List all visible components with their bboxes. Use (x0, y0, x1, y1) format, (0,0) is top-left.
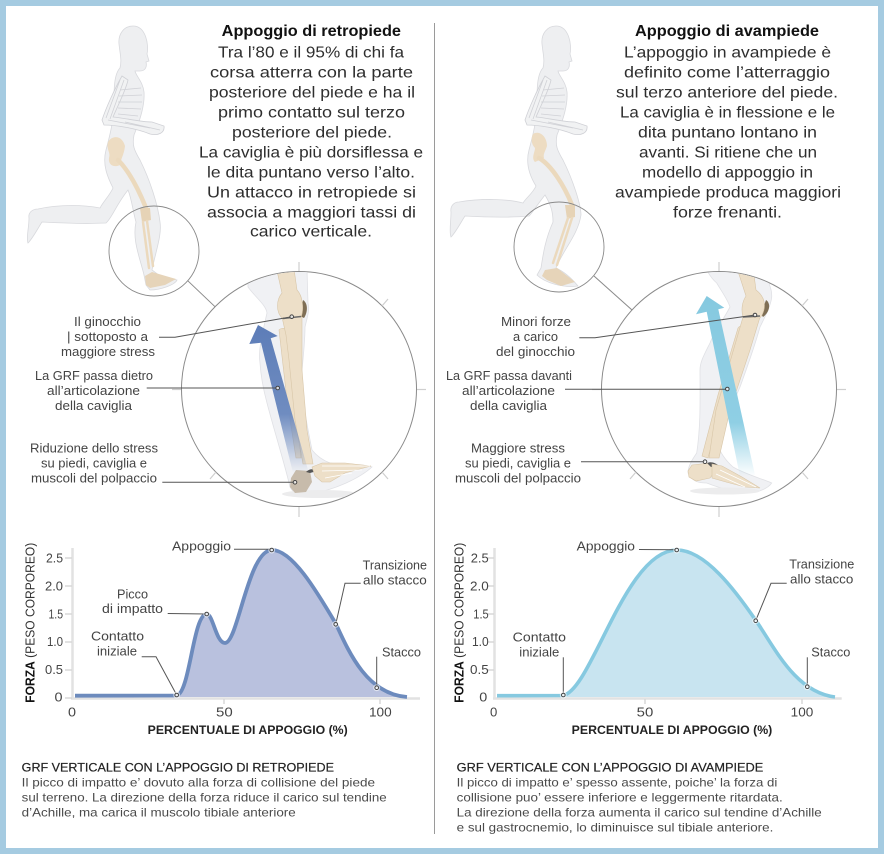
chart: vertical GRF forefoot (452, 540, 854, 737)
text block: forefoot description: avampiede produca maggiori (615, 184, 841, 201)
callout: GRF behind ankle: La GRF passa dietro (35, 369, 153, 383)
caption: rearfoot GRF (22, 761, 387, 820)
y axis title: FORZA (PESO CORPOREO) (24, 543, 38, 703)
magnifier connector (594, 276, 632, 310)
y axis numbers: 1.5 (48, 606, 63, 621)
annotation: initial contact: iniziale (519, 646, 559, 660)
annotation: initial contact (91, 630, 180, 698)
callout: reduced stress: Riduzione dello stress (30, 442, 158, 456)
annotation: impact peak: Picco (117, 587, 148, 601)
callout: knee (496, 313, 757, 359)
callout: greater stress (455, 442, 707, 486)
callout: greater stress: su piedi, caviglia e (465, 457, 571, 471)
y axis numbers: 0 (479, 690, 487, 705)
annotation: initial contact: Contatto (513, 631, 566, 645)
y axis numbers: 0 (54, 690, 62, 705)
y axis numbers: 2.0 (470, 579, 489, 594)
illustration: runner with rearfoot strike (27, 26, 177, 290)
text block: rearfoot description: le dita puntano verso l’alto. (207, 164, 415, 181)
text block: rearfoot description: corsa atterra con la parte (210, 64, 413, 81)
arrow: ground reaction force (249, 325, 308, 473)
text block: forefoot description: dita puntano lontano in (638, 124, 817, 141)
magnified leg with forefoot strike (592, 260, 846, 517)
x axis numbers: 0 (490, 705, 497, 720)
annotation: impact peak (102, 587, 210, 618)
callout: reduced stress: su piedi, caviglia e (41, 457, 147, 471)
text block: forefoot description: sul terzo anteriore del piede. (616, 84, 838, 101)
magnifier connector (188, 281, 215, 307)
y axis numbers: 0.5 (45, 662, 63, 677)
annotation: stance (577, 540, 680, 554)
callout: greater stress: muscoli del polpaccio (455, 472, 581, 486)
annotation: initial contact: iniziale (97, 645, 137, 659)
y axis numbers: 0.5 (470, 662, 489, 677)
annotation: initial contact: Contatto (91, 630, 144, 644)
y axis numbers (45, 551, 63, 705)
y axis numbers: 1.0 (472, 634, 489, 649)
annotation: initial contact (513, 631, 567, 698)
y axis numbers: 1.5 (473, 606, 489, 621)
callout: reduced stress (30, 442, 297, 486)
annotation: transition to toe-off: Transizione (363, 558, 427, 572)
text block: forefoot description: forze frenanti. (673, 204, 782, 221)
text block: rearfoot description: carico verticale. (250, 224, 372, 241)
x axis numbers: 100 (791, 705, 813, 720)
x axis numbers: 50 (637, 705, 653, 720)
text block: rearfoot description: Un attacco in retropiede si (207, 184, 416, 201)
callout: knee: | sottoposto a (67, 330, 148, 344)
callout: knee: del ginocchio (496, 345, 575, 359)
caption: rearfoot GRF: GRF VERTICALE CON L’APPOGGIO DI RETROPIEDE (22, 761, 334, 775)
text block: rearfoot description: La caviglia è più dorsiflessa e (199, 144, 423, 161)
callout: knee: a carico (513, 330, 558, 344)
callout: GRF in front of ankle: La GRF passa davanti (446, 369, 572, 383)
callout: knee (61, 315, 294, 359)
y axis title: FORZA (PESO CORPOREO) (452, 543, 466, 703)
x axis title: PERCENTUALE DI APPOGGIO (%) (572, 723, 772, 737)
y axis numbers: 2.5 (471, 551, 489, 566)
callout: GRF behind ankle (35, 369, 280, 413)
caption: forefoot GRF: GRF VERTICALE CON L’APPOGGIO DI AVAMPIEDE (457, 761, 763, 775)
x axis numbers: 50 (216, 705, 233, 720)
text block: rearfoot description: posteriore del piede. (232, 124, 392, 141)
small magnifier circle (109, 206, 199, 296)
annotation: stance: Appoggio (577, 540, 635, 554)
y axis numbers: 2.5 (46, 551, 63, 566)
text block: forefoot description: modello di appoggio in (642, 164, 813, 181)
illustration: runner with forefoot strike (450, 26, 587, 286)
callout: GRF in front of ankle (446, 369, 729, 413)
y axis numbers (470, 551, 489, 705)
annotation: toe-off: Stacco (382, 646, 421, 660)
callout: GRF behind ankle: della caviglia (55, 399, 132, 413)
callout: greater stress: Maggiore stress (471, 442, 565, 456)
callout: reduced stress: muscoli del polpaccio (31, 472, 157, 486)
annotation: toe-off (373, 646, 421, 691)
magnified leg with rearfoot strike (172, 262, 426, 517)
annotation: transition to toe-off: allo stacco (363, 573, 427, 587)
x axis numbers (68, 705, 392, 720)
annotation: transition to toe-off (752, 557, 854, 624)
caption: rearfoot GRF: Il picco di impatto e’ dovuto alla forza di collisione del piede (22, 776, 375, 790)
annotation: transition to toe-off (332, 558, 427, 628)
callout: GRF in front of ankle: all’articolazione (462, 384, 555, 398)
text block: rearfoot description: associa a maggiori tassi di (207, 204, 416, 221)
callout: GRF in front of ankle: della caviglia (470, 399, 547, 413)
callout: knee: Minori forze (501, 315, 571, 329)
caption: forefoot GRF: La direzione della forza aumenta il carico sul tendine d’Achille (457, 806, 822, 820)
y axis numbers: 2.0 (45, 579, 63, 594)
x axis numbers: 100 (369, 705, 392, 720)
caption: forefoot GRF: collisione puo’ essere inferiore e leggermente ritardata. (457, 791, 783, 805)
caption: forefoot GRF (457, 761, 822, 835)
annotation: stance (172, 540, 275, 554)
heading: forefoot strike: Appoggio di avampiede (635, 23, 819, 40)
text block: forefoot description: La caviglia è in flessione e le (620, 104, 835, 121)
text block: forefoot description: definito come l’atterraggio (624, 64, 830, 81)
callout: GRF behind ankle: all’articolazione (47, 384, 140, 398)
caption: forefoot GRF: Il picco di impatto e’ spesso assente, poiche’ la forza di (457, 776, 777, 790)
caption: rearfoot GRF: sul terreno. La direzione della forza riduce il carico sul tendine (22, 791, 387, 805)
annotation: transition to toe-off: Transizione (789, 557, 854, 571)
text block: rearfoot description: Tra l’80 e il 95% di chi fa (218, 44, 404, 61)
column divider (434, 23, 436, 834)
text block: forefoot description: L’appoggio in avampiede è (624, 44, 831, 61)
text block: rearfoot description (199, 44, 423, 241)
heading: rearfoot strike: Appoggio di retropiede (222, 23, 401, 40)
text block: rearfoot description: posteriore del piede e ha il (209, 84, 415, 101)
annotation: impact peak: di impatto (102, 602, 163, 616)
annotation: toe-off (804, 646, 850, 690)
panel: rearfoot strike (22, 23, 427, 820)
chart: vertical GRF rearfoot (24, 540, 427, 737)
annotation: toe-off: Stacco (811, 646, 850, 660)
annotation: transition to toe-off: allo stacco (790, 572, 853, 586)
text block: forefoot description: avanti. Si ritiene che un (639, 144, 817, 161)
text block: rearfoot description: primo contatto sul terzo (218, 104, 405, 121)
arrow: ground reaction force (696, 296, 755, 477)
x axis title: PERCENTUALE DI APPOGGIO (%) (148, 723, 348, 737)
small magnifier circle (514, 202, 604, 292)
y axis numbers: 1.0 (47, 634, 63, 649)
callout: knee: Il ginocchio (74, 315, 141, 329)
x axis numbers (490, 705, 813, 720)
caption: forefoot GRF: e sul gastrocnemio, lo diminuisce sul tibiale anteriore. (457, 821, 773, 835)
panel: forefoot strike (446, 23, 854, 835)
annotation: stance: Appoggio (172, 540, 231, 554)
text block: forefoot description (615, 44, 841, 221)
caption: rearfoot GRF: d’Achille, ma carica il muscolo tibiale anteriore (22, 806, 296, 820)
callout: knee: maggiore stress (61, 345, 155, 359)
x axis numbers: 0 (68, 705, 76, 720)
